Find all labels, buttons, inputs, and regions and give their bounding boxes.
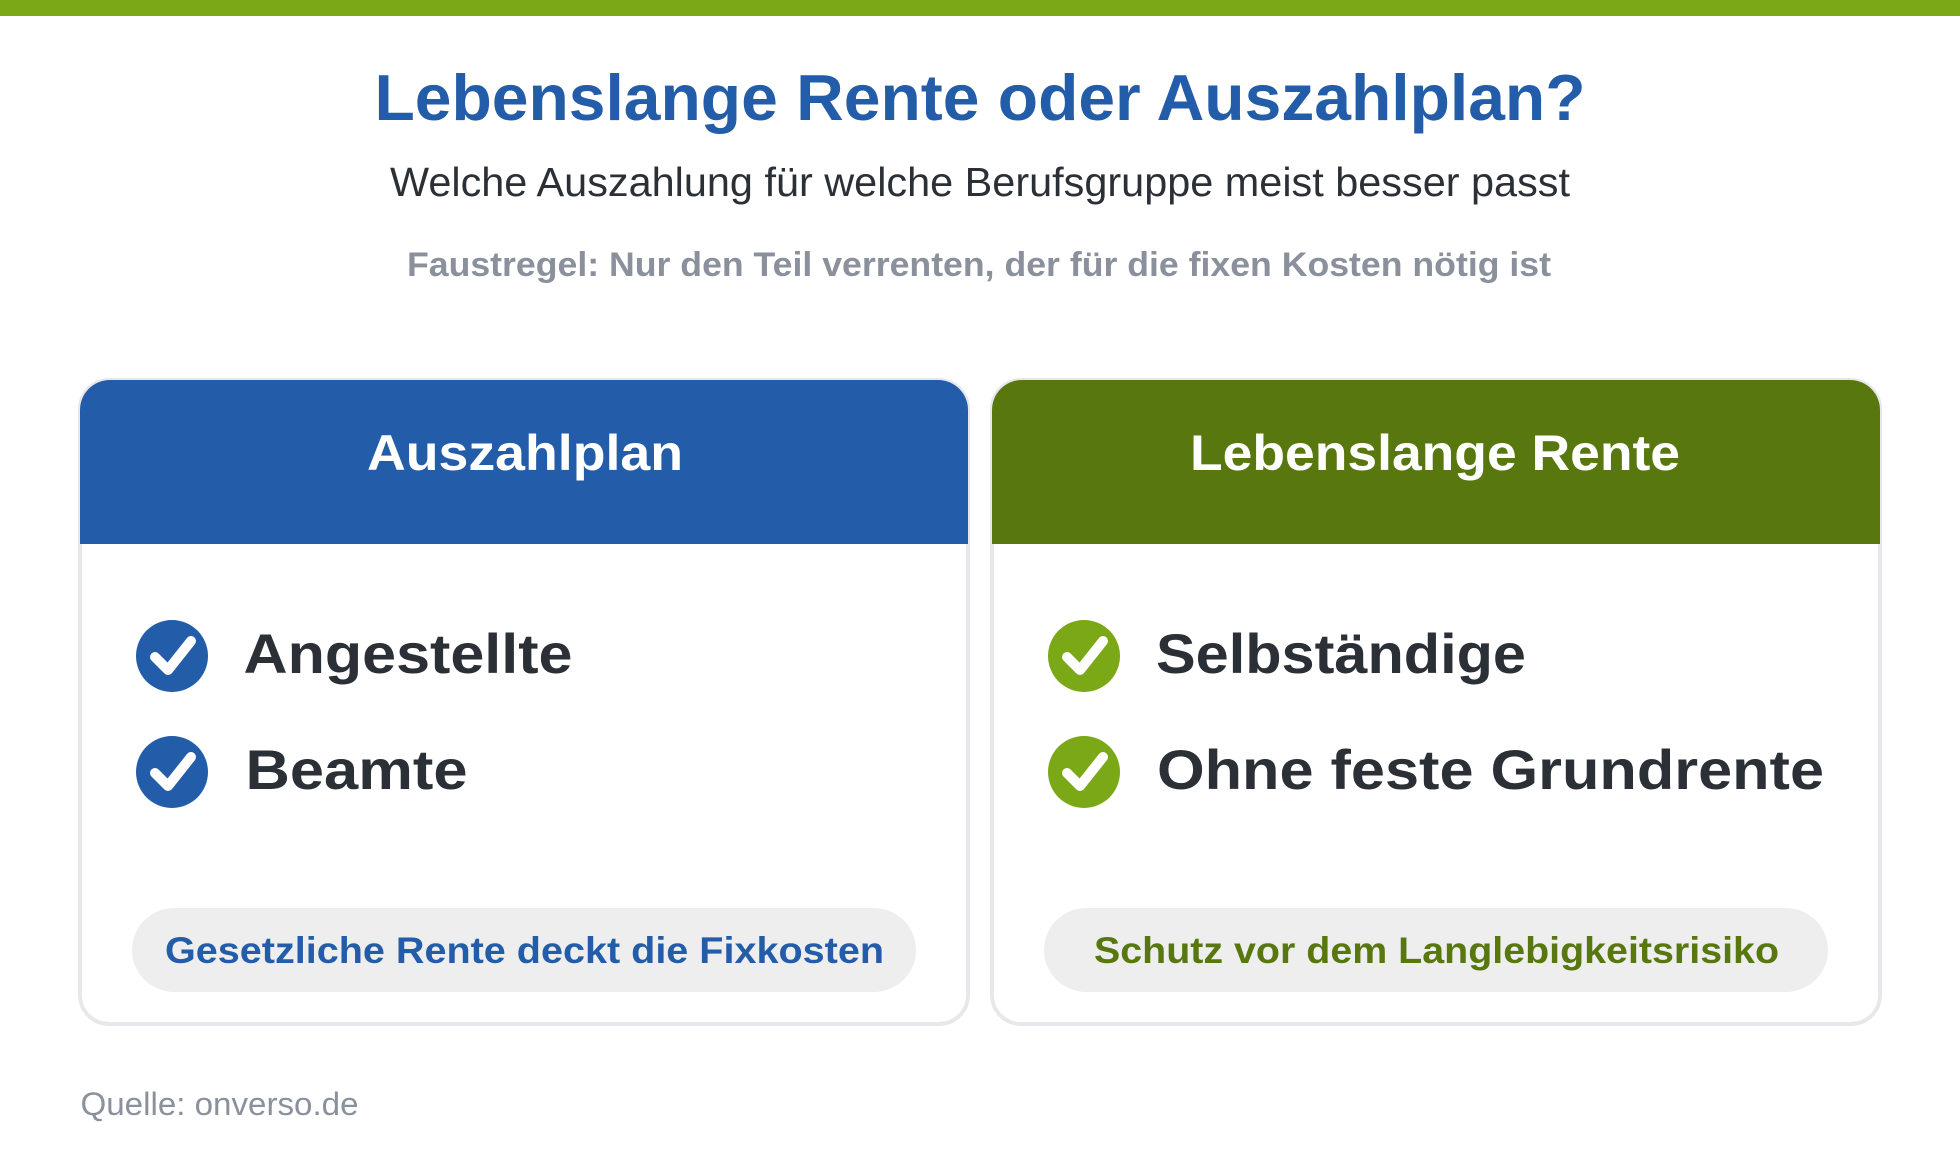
panel: Lebenslange Rente	[992, 380, 1880, 1024]
subtitle: Welche Auszahlung für welche Berufsgruppe meist besser passt	[390, 159, 1571, 205]
list item: Selbständige	[1048, 620, 1526, 692]
pill: Schutz vor dem Langlebigkeitsrisiko: Schutz vor dem Langlebigkeitsrisiko	[1094, 930, 1779, 971]
list item: Selbständige: Selbständige	[1156, 622, 1526, 685]
panel: Auszahlplan	[80, 380, 968, 1024]
pill: Schutz vor dem Langlebigkeitsrisiko	[1044, 908, 1828, 992]
panel header: Auszahlplan: Auszahlplan	[367, 425, 683, 481]
list item: Beamte	[136, 736, 468, 808]
list item: Ohne feste Grundrente: Ohne feste Grundrente	[1157, 738, 1824, 801]
list item: Angestellte	[136, 620, 572, 692]
panel header: Lebenslange Rente	[992, 380, 1880, 544]
list item: Angestellte: Angestellte	[244, 622, 572, 685]
pill: Gesetzliche Rente: Gesetzliche Rente deckt die Fixkosten	[165, 930, 884, 971]
rule of thumb: Faustregel: Nur den Teil verrenten, der für die fixen Kosten nötig ist	[407, 246, 1551, 284]
list item: Ohne feste Grundrente	[1048, 736, 1824, 808]
title: Lebenslange Rente oder Auszahlplan?	[374, 61, 1586, 134]
panel header: Lebenslange Rente: Lebenslange Rente	[1190, 425, 1680, 481]
pill: Gesetzliche Rente	[132, 908, 916, 992]
panel header: Auszahlplan	[80, 380, 968, 544]
list item: Beamte: Beamte	[246, 738, 468, 801]
top accent bar	[0, 0, 1960, 16]
source note: Quelle: onverso.de	[80, 1086, 358, 1122]
